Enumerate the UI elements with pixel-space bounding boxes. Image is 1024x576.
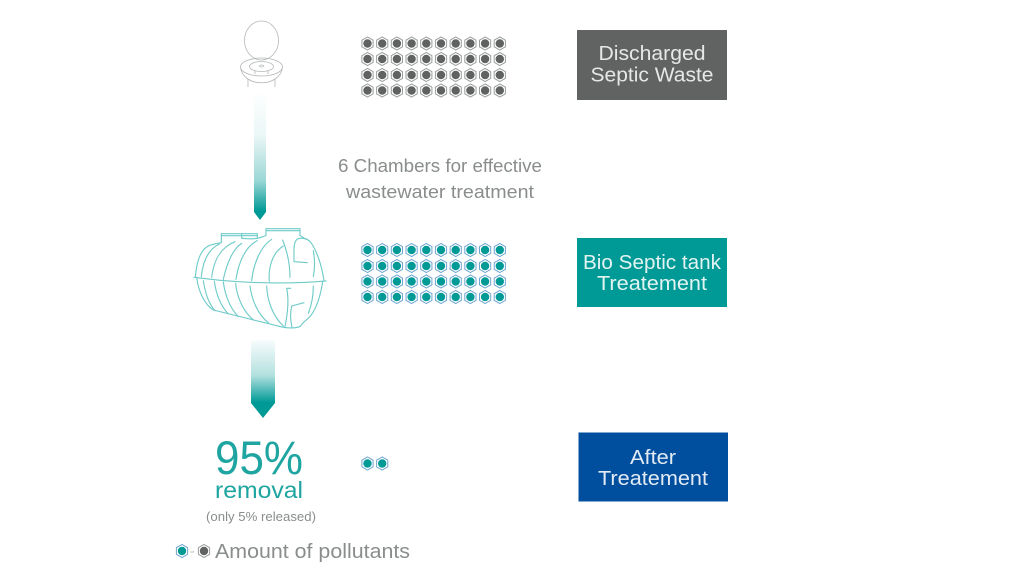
label: bio septic tank treatment: Bio Septic tank bbox=[583, 252, 722, 274]
label: after treatment: Treatement bbox=[598, 468, 708, 490]
label: after treatment bbox=[578, 432, 728, 502]
stat: 95% removal bbox=[206, 431, 316, 524]
label: discharged septic waste: Septic Waste bbox=[590, 64, 714, 86]
pollutant grid: after treatment bbox=[362, 457, 388, 470]
stat: 95% removal: (only 5% released) bbox=[206, 509, 316, 524]
arrow: toilet to tank bbox=[254, 90, 266, 220]
pollutant grid: bio septic tank bbox=[362, 243, 505, 304]
stat: 95% removal: 95% bbox=[215, 431, 303, 484]
stat: 95% removal: removal bbox=[215, 477, 303, 503]
legend: amount of pollutants: or bbox=[190, 549, 195, 554]
legend: amount of pollutants: Amount of pollutants bbox=[215, 541, 410, 563]
icon: bio septic tank bbox=[194, 229, 326, 328]
text: chambers description: 6 Chambers for effective bbox=[338, 156, 542, 176]
text: chambers description bbox=[338, 156, 542, 202]
text: chambers description: wastewater treatment bbox=[345, 182, 534, 202]
label: bio septic tank treatment bbox=[577, 238, 727, 307]
label: bio septic tank treatment: Treatement bbox=[597, 273, 707, 295]
label: discharged septic waste bbox=[577, 30, 727, 100]
arrow: tank to removal bbox=[251, 340, 275, 418]
label: discharged septic waste: Discharged bbox=[598, 43, 706, 65]
pollutant grid: discharged waste bbox=[362, 37, 505, 97]
icon: toilet bbox=[240, 21, 282, 87]
label: after treatment: After bbox=[630, 447, 676, 469]
